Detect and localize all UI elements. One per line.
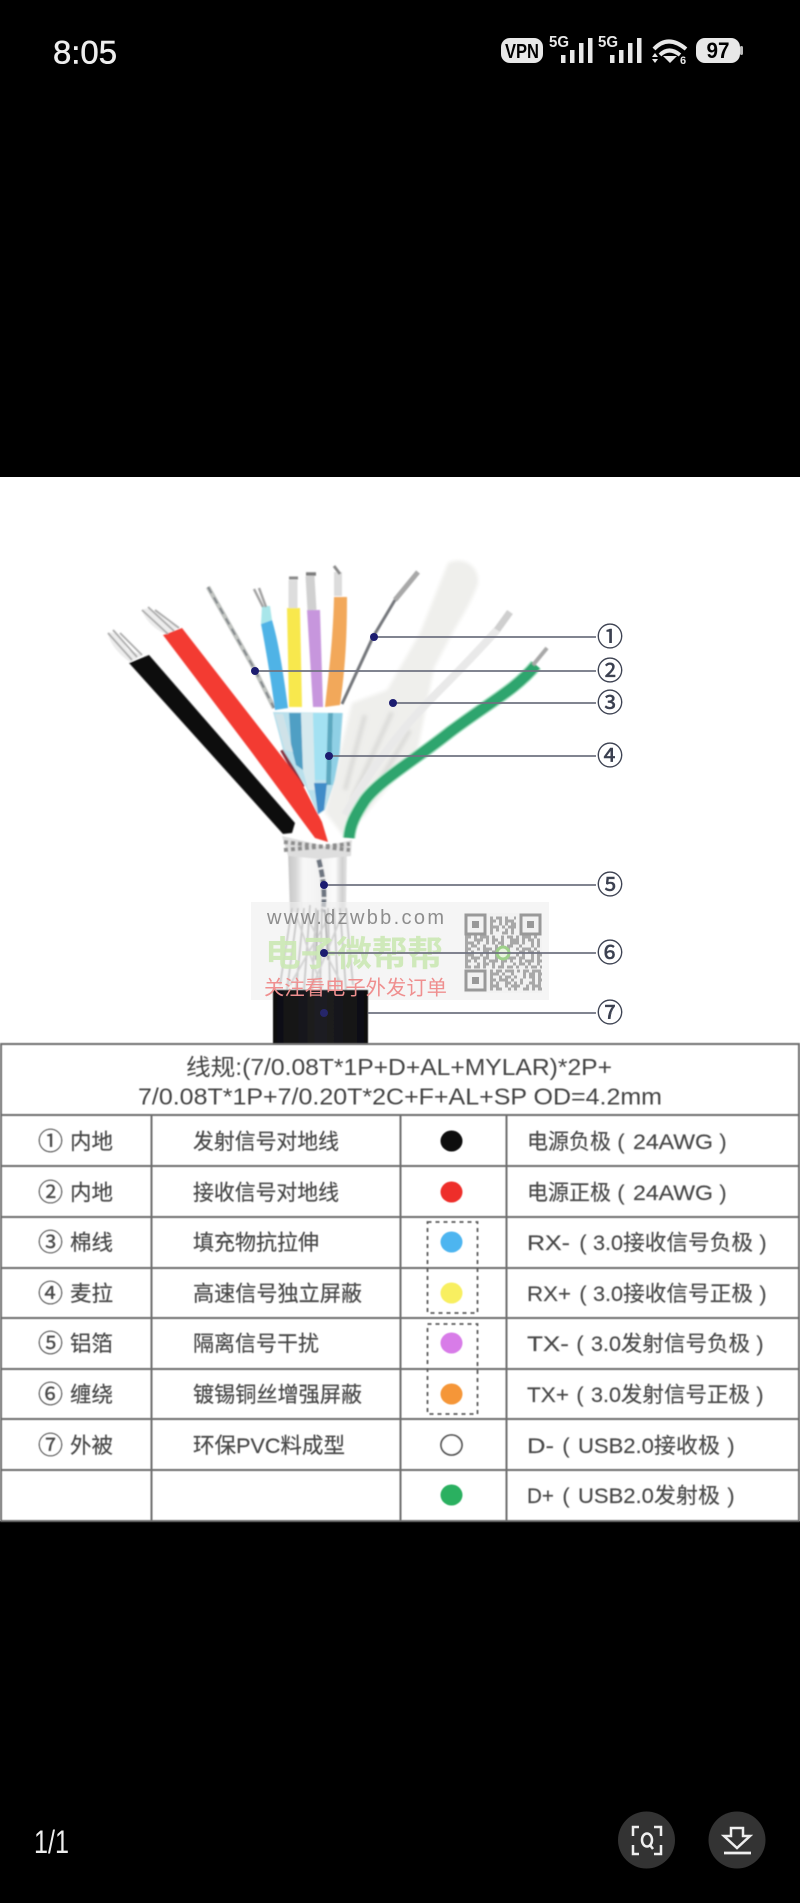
row: TX+: 3.0发射信号正极 xyxy=(591,1383,750,1407)
watermark panel xyxy=(251,902,549,1000)
row: RX+: 3.0接收信号正极 xyxy=(593,1282,753,1306)
row: TX+: ) xyxy=(756,1383,764,1407)
row: TX+: ( xyxy=(576,1383,584,1407)
callout 5 xyxy=(320,870,623,900)
row: D- xyxy=(527,1434,735,1458)
callout 6: ⑥ xyxy=(597,938,623,968)
drain strand in foil xyxy=(316,850,324,912)
tinned copper braid xyxy=(280,905,353,990)
row: power positive: 电源正极 xyxy=(527,1181,611,1205)
column: layer functions: 环保PVC料成型 xyxy=(193,1434,345,1458)
row: power positive: 24AWG xyxy=(633,1181,713,1205)
column: layer names: ② xyxy=(38,1179,63,1207)
row: TX-: ) xyxy=(756,1332,764,1356)
row: RX- xyxy=(527,1231,767,1255)
row: TX- xyxy=(527,1332,764,1356)
row: RX+: ) xyxy=(759,1282,767,1306)
row: RX-: RX- xyxy=(527,1231,570,1255)
icon: signal 1: 5G xyxy=(549,34,569,51)
row: RX+: RX+ xyxy=(527,1282,571,1306)
column: layer names: ④ xyxy=(38,1280,63,1308)
black wire xyxy=(108,630,295,834)
row: D+: ) xyxy=(727,1484,735,1508)
column: layer functions: 高速信号独立屏蔽 xyxy=(193,1282,362,1306)
braid collar xyxy=(282,836,352,859)
white cotton filler xyxy=(325,561,478,838)
row: power negative: 24AWG xyxy=(633,1130,713,1154)
row: D+: ( xyxy=(562,1484,570,1508)
column: layer names: ⑦ xyxy=(38,1432,63,1460)
bottom toolbar xyxy=(34,1812,766,1868)
row: TX+: TX+ xyxy=(527,1383,569,1407)
icon: signal 2 xyxy=(598,34,642,63)
callout 2: ② xyxy=(597,656,623,686)
row: power positive: ( xyxy=(617,1181,625,1205)
column: layer names: ① xyxy=(38,1128,63,1156)
row: power negative: ) xyxy=(719,1130,727,1154)
row: D-: ( xyxy=(562,1434,570,1458)
dashed pair box TX xyxy=(428,1324,478,1414)
row: D+: D+ xyxy=(527,1484,554,1508)
row: power positive xyxy=(527,1181,727,1205)
column: layer functions: 接收信号对地线 xyxy=(193,1181,339,1205)
dark wire sliver xyxy=(282,750,303,787)
column: layer names: ⑥ xyxy=(38,1381,63,1409)
watermark url: www.dzwbb.com xyxy=(266,907,444,929)
status bar xyxy=(53,34,743,70)
foil layer xyxy=(288,850,347,912)
red wire xyxy=(142,607,328,842)
icon: scan search button xyxy=(618,1812,675,1868)
column: layer names: 麦拉 xyxy=(70,1282,113,1306)
ground wire right xyxy=(342,572,418,704)
row: power positive: ) xyxy=(719,1181,727,1205)
callout 7: ⑦ xyxy=(597,998,623,1028)
table header xyxy=(138,1054,662,1110)
clock: 8:05 xyxy=(53,34,117,70)
callout 5: ⑤ xyxy=(597,870,623,900)
cable illustration xyxy=(108,561,547,990)
column: layer names xyxy=(38,1128,113,1460)
column: layer names: 铝箔 xyxy=(70,1332,113,1356)
callout 4 xyxy=(325,741,623,771)
table header: 线规:(7/0.08T*1P+D+AL+MYLAR)*2P+ xyxy=(186,1054,612,1080)
callout 3: ③ xyxy=(597,688,623,718)
purple wire xyxy=(306,574,323,707)
battery: 97 xyxy=(706,38,730,63)
blue wire xyxy=(254,588,288,710)
table grid xyxy=(0,1044,800,1521)
orange wire xyxy=(325,566,347,707)
black jacket xyxy=(273,990,368,1044)
row: RX-: ( xyxy=(579,1231,587,1255)
callout 4: ④ xyxy=(597,741,623,771)
callout 6 xyxy=(320,938,623,968)
row: RX-: 3.0接收信号负极 xyxy=(593,1231,753,1255)
row: TX-: ( xyxy=(576,1332,584,1356)
icon: signal 2: 5G xyxy=(598,34,618,51)
row: RX-: ) xyxy=(759,1231,767,1255)
column: layer functions: 镀锡铜丝增强屏蔽 xyxy=(193,1383,362,1407)
icon: signal 1 xyxy=(549,34,592,63)
row: RX+: ( xyxy=(579,1282,587,1306)
callout 7 xyxy=(320,998,623,1028)
row: TX-: TX- xyxy=(527,1332,569,1356)
column: layer names: 棉线 xyxy=(70,1231,113,1255)
column: layer names: 外被 xyxy=(70,1434,113,1458)
column: layer functions: 填充物抗拉伸 xyxy=(193,1231,319,1255)
white image panel xyxy=(0,477,800,1521)
watermark brand: 电子微帮帮 xyxy=(265,935,443,974)
row: D-: D- xyxy=(527,1434,554,1458)
column: layer functions xyxy=(193,1130,362,1458)
row: TX-: 3.0发射信号负极 xyxy=(591,1332,750,1356)
yellow wire xyxy=(287,578,302,707)
icon: wifi xyxy=(652,42,686,67)
row: power negative: ( xyxy=(617,1130,625,1154)
watermark xyxy=(264,907,542,1000)
row: power negative: 电源负极 xyxy=(527,1130,611,1154)
column: layer names: ③ xyxy=(38,1229,63,1257)
table header: 7/0.08T*1P+7/0.20T*2C+F+AL+SP OD=4.2mm xyxy=(138,1084,662,1110)
icon: wifi: 6 xyxy=(680,55,686,67)
column: layer functions: 隔离信号干扰 xyxy=(193,1332,319,1356)
row: D+: USB2.0发射极 xyxy=(578,1484,720,1508)
watermark slogan: 关注看电子外发订单 xyxy=(264,976,447,1000)
column: layer names: 内地 xyxy=(70,1181,113,1205)
row: power negative xyxy=(527,1130,727,1154)
column: layer names: 缠绕 xyxy=(70,1383,113,1407)
callout 3 xyxy=(389,688,623,718)
column: layer names: ⑤ xyxy=(38,1330,63,1358)
row: D-: ) xyxy=(727,1434,735,1458)
row: RX+ xyxy=(527,1282,767,1306)
VPN badge: VPN xyxy=(505,41,539,63)
column: wire colour dots xyxy=(440,1130,462,1506)
icon: download button xyxy=(708,1812,766,1868)
spec table xyxy=(0,1044,800,1521)
callout 1: ① xyxy=(597,622,623,652)
callout 1 xyxy=(370,622,623,652)
mylar shield xyxy=(273,712,343,815)
row: TX+ xyxy=(527,1383,764,1407)
column: layer names: 内地 xyxy=(70,1130,113,1154)
watermark QR code xyxy=(464,913,542,993)
column: layer functions: 发射信号对地线 xyxy=(193,1130,339,1154)
green wire xyxy=(349,648,547,838)
battery xyxy=(696,38,743,63)
ground wire left xyxy=(208,587,274,708)
thin white wire xyxy=(345,612,510,815)
callout lines and numbers xyxy=(251,622,623,1028)
dashed pair box RX xyxy=(428,1222,478,1313)
column: wire definitions xyxy=(527,1130,767,1508)
row: D+ xyxy=(527,1484,735,1508)
callout 2 xyxy=(251,656,623,686)
page counter: 1/1 xyxy=(34,1824,69,1860)
row: D-: USB2.0接收极 xyxy=(578,1434,720,1458)
